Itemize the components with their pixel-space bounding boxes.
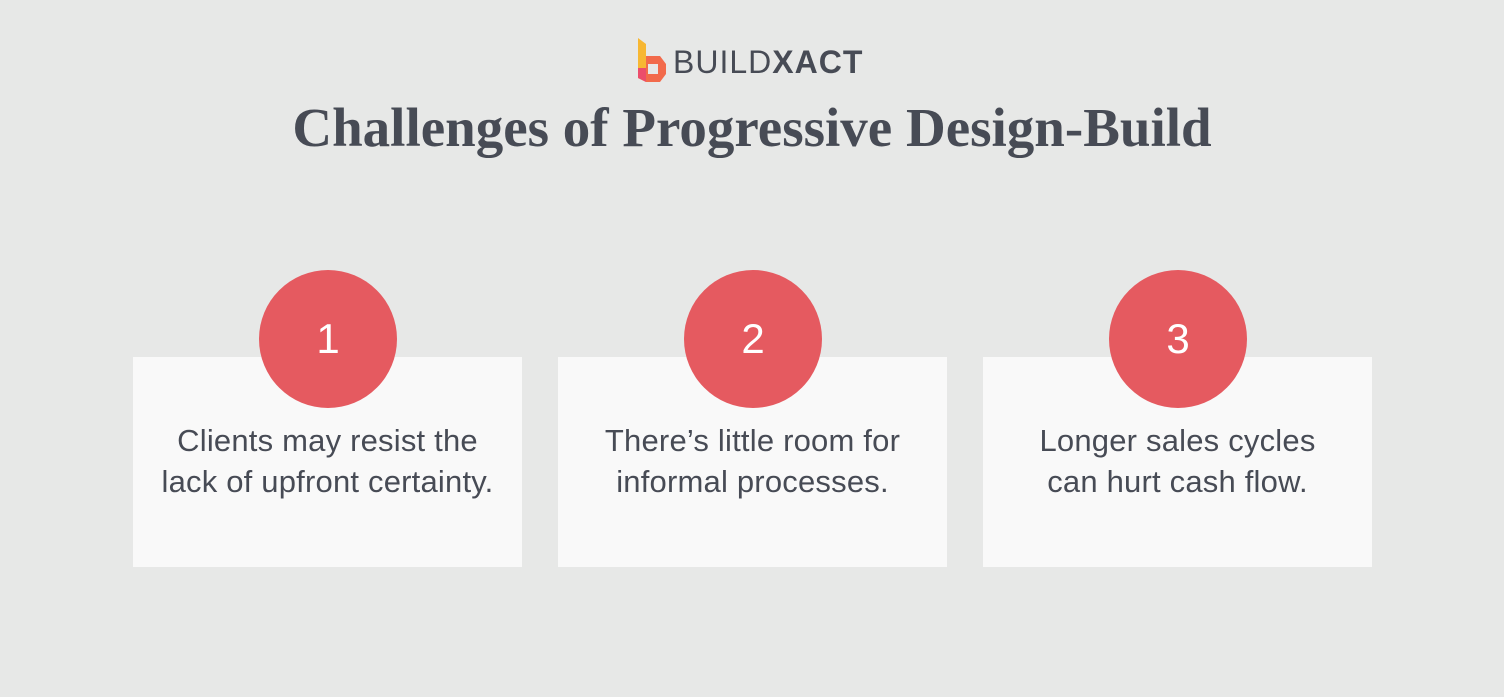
text 1: lack of upfront certainty. (161, 464, 494, 499)
icon: logo b (638, 38, 666, 82)
text 3 (1039, 423, 1316, 499)
panel 1 (133, 357, 522, 567)
logo text: BUILDXACT (673, 44, 863, 80)
title: Challenges of Progressive Design-Build (292, 97, 1212, 158)
text 3: can hurt cash flow. (1047, 464, 1308, 499)
logo (638, 38, 863, 82)
circle 3: 3 (1166, 315, 1190, 362)
text 2: There’s little room for (605, 423, 900, 458)
text 1 (161, 423, 494, 499)
circle 1: 1 (316, 315, 340, 362)
panel 2 (558, 357, 947, 567)
circle 3 (1109, 270, 1247, 408)
text 2 (605, 423, 900, 499)
circle 1 (259, 270, 397, 408)
circle 2: 2 (741, 315, 765, 362)
text 3: Longer sales cycles (1039, 423, 1316, 458)
text 2: informal processes. (616, 464, 889, 499)
circle 2 (684, 270, 822, 408)
text 1: Clients may resist the (177, 423, 478, 458)
panel 3 (983, 357, 1372, 567)
